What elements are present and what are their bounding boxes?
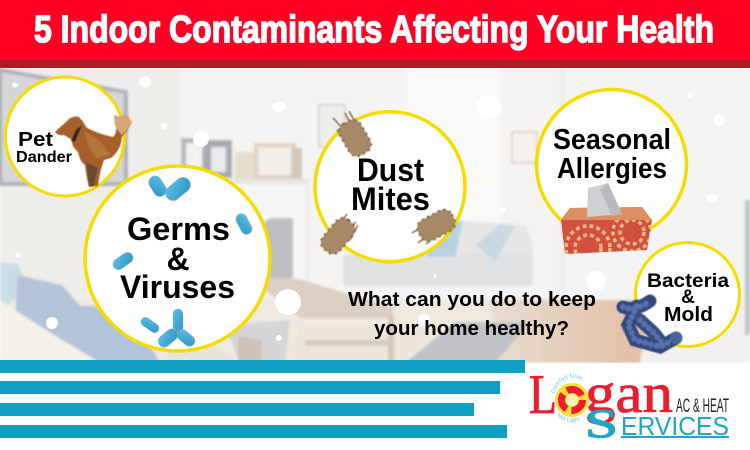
header banner	[0, 0, 750, 68]
label: ampersand: &	[166, 241, 190, 277]
label: dust: Dust	[357, 152, 424, 188]
logo: logan services: S	[585, 401, 618, 446]
footer panel	[0, 360, 729, 446]
white dust particles	[12, 76, 725, 341]
label: viruses: Viruses	[120, 269, 235, 305]
redacted bars	[0, 360, 525, 438]
icon: mold bacteria	[623, 301, 682, 347]
panel: bacteria and mold	[623, 242, 740, 347]
fireplace	[228, 179, 310, 184]
panel: germs and viruses	[85, 166, 270, 351]
label: ampersand: &	[681, 287, 695, 308]
panel: seasonal allergies	[536, 90, 686, 270]
logo: logan services: L	[529, 364, 557, 426]
small picture on the left wall	[319, 105, 345, 147]
label: bacteria: Bacteria	[647, 270, 729, 292]
panel: dust mites	[315, 111, 465, 262]
logo: logan services: Not Later	[557, 413, 580, 422]
label: dander: Dander	[16, 149, 72, 166]
wall frame: left	[0, 70, 126, 184]
logo: logan services: ERVICES	[621, 411, 729, 441]
question text: What can you do to keep	[348, 288, 596, 311]
question text	[348, 288, 596, 340]
label: mold: Mold	[664, 304, 713, 326]
left couch	[0, 262, 28, 310]
wall picture	[512, 132, 537, 163]
logo: logan services: gan	[585, 363, 673, 425]
coffee table	[265, 277, 393, 318]
icon: dog	[55, 114, 132, 187]
label: mites: Mites	[351, 181, 430, 217]
right tv	[745, 200, 750, 335]
icon: dust mite top	[333, 111, 374, 160]
label: germs: Germs	[127, 211, 230, 247]
panel: pet dander	[6, 77, 132, 196]
label: pet: Pet	[18, 129, 53, 151]
icon: dust mite left	[317, 214, 359, 258]
icon: germ capsules	[111, 173, 254, 350]
mantel frames	[181, 138, 302, 179]
logo: logan services: Comfort Now	[551, 374, 583, 394]
label: allergies: Allergies	[557, 153, 667, 185]
floor	[0, 300, 750, 363]
icon: tissue box	[561, 183, 652, 254]
label: seasonal: Seasonal	[553, 124, 671, 156]
background: living room photo	[0, 68, 750, 363]
question text: your home healthy?	[374, 317, 569, 340]
icon: dust mite right	[412, 206, 458, 245]
logo: logan services	[529, 363, 729, 446]
sofa	[343, 220, 533, 285]
